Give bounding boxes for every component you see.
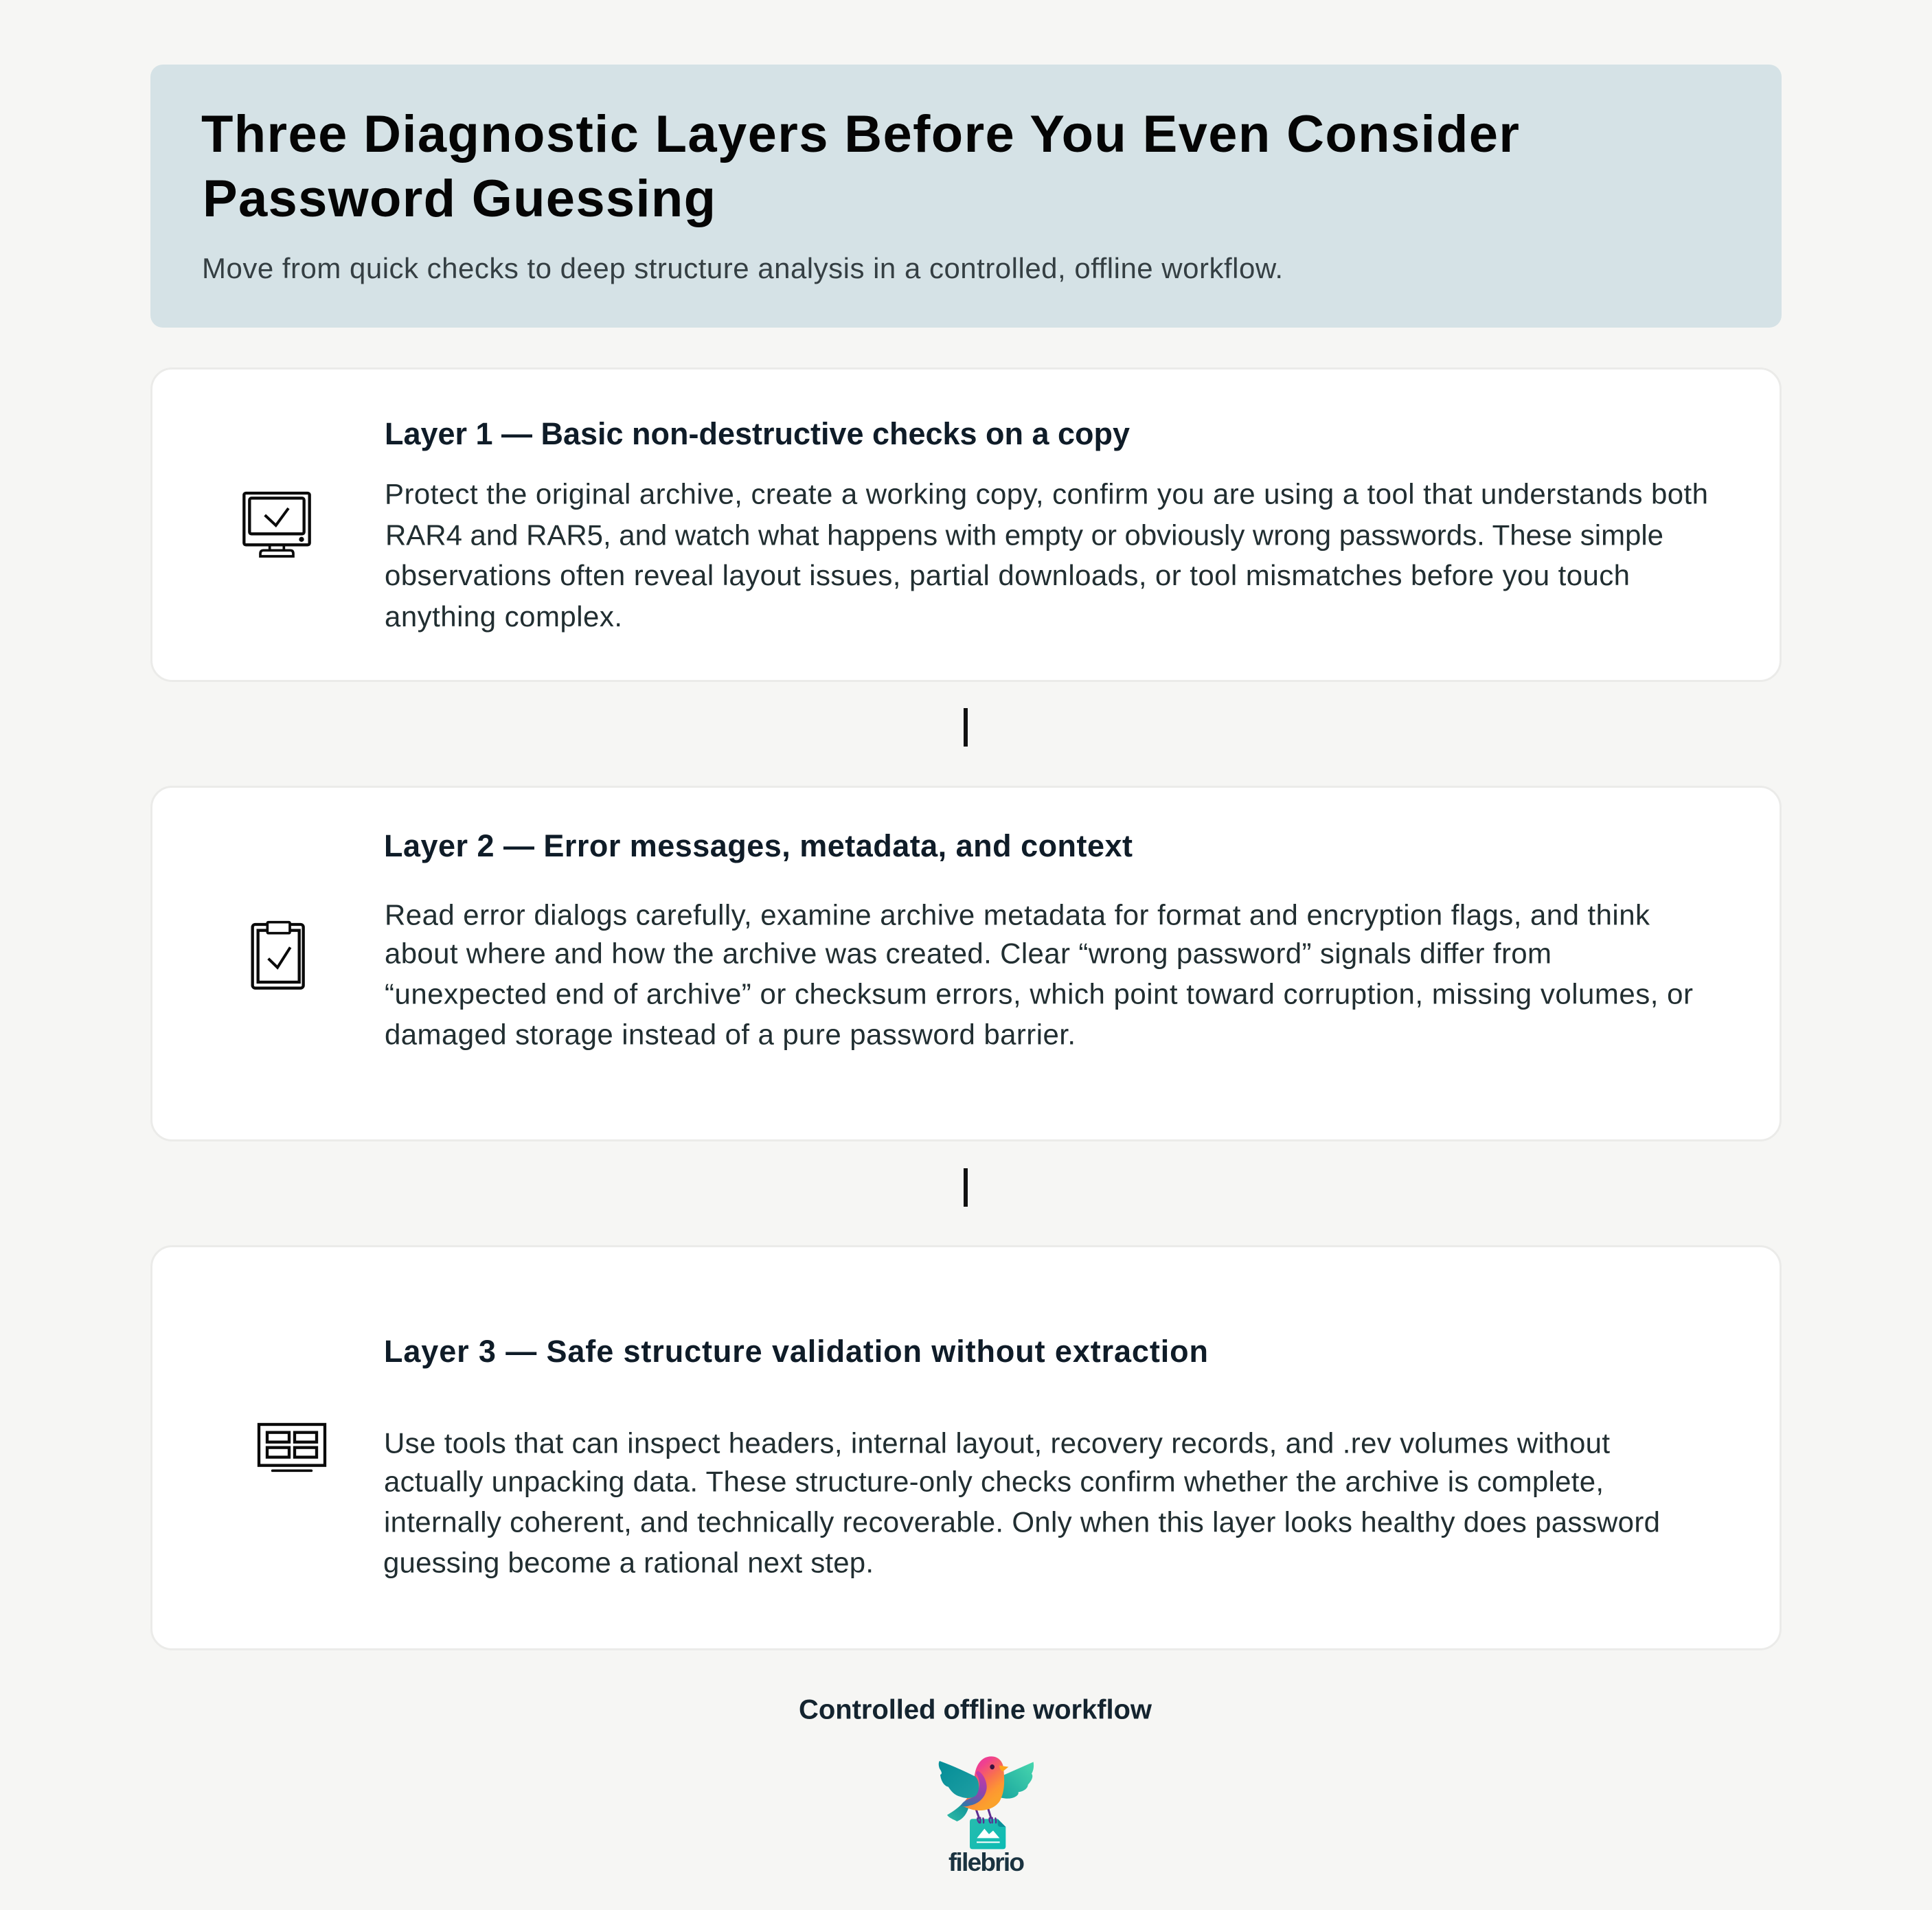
feet — [977, 1818, 996, 1823]
file — [970, 1819, 1005, 1849]
eye — [990, 1764, 995, 1769]
right wing — [999, 1762, 1034, 1799]
layer 2 body text: about where and how the archive was created. Clear “wrong password” signals differ from — [385, 937, 1552, 970]
layer 3 body text — [383, 1427, 1660, 1578]
tail — [947, 1803, 969, 1821]
layer 2 heading: Layer 2 — Error messages, metadata, and context — [384, 828, 1133, 863]
subtitle: Move from quick checks to deep structure analysis in a controlled, offline workflow. — [202, 252, 1283, 284]
layer 1 body text: anything complex. — [385, 600, 622, 633]
layer 1 body text: Protect the original archive, create a working copy, confirm you are using a tool that understands both — [385, 478, 1708, 510]
layer 1 body text — [385, 478, 1708, 633]
connector 1 — [964, 708, 968, 747]
layer 1 body text: RAR4 and RAR5, and watch what happens with empty or obviously wrong passwords. These simple — [385, 519, 1663, 551]
belly shadow — [961, 1771, 987, 1806]
file corner — [998, 1819, 1005, 1827]
layer 3 body text: actually unpacking data. These structure-only checks confirm whether the archive is complete, — [384, 1466, 1604, 1497]
layer 2 body text: Read error dialogs carefully, examine archive metadata for format and encryption flags, and think — [385, 898, 1650, 931]
body — [961, 1756, 1004, 1810]
layer 3 body text: guessing become a rational next step. — [383, 1547, 874, 1578]
layer 2 body text: “unexpected end of archive” or checksum errors, which point toward corruption, missing volumes, or — [385, 978, 1693, 1010]
title — [201, 105, 1519, 228]
file mountain — [977, 1829, 999, 1838]
icon: clipboard with check mark — [253, 922, 304, 988]
panel: layer 3 — [151, 1246, 1780, 1650]
logo: filebrio bird — [939, 1756, 1034, 1876]
panel: layer 1 — [151, 368, 1780, 681]
icon: window with grid — [259, 1424, 325, 1470]
layer 3 body text: Use tools that can inspect headers, internal layout, recovery records, and .rev volumes without — [384, 1427, 1610, 1459]
layer 1 body text: observations often reveal layout issues, partial downloads, or tool mismatches before you touch — [385, 559, 1630, 591]
layer 3 heading: Layer 3 — Safe structure validation without extraction — [384, 1334, 1208, 1369]
legs — [976, 1808, 991, 1819]
beak — [999, 1766, 1008, 1771]
footer caption: Controlled offline workflow — [799, 1695, 1152, 1725]
title: Password Guessing — [203, 170, 716, 228]
connector 2 — [964, 1168, 968, 1207]
layer 3 body text: internally coherent, and technically recoverable. Only when this layer looks healthy does password — [384, 1505, 1660, 1538]
layer 2 body text: damaged storage instead of a pure password barrier. — [385, 1018, 1076, 1051]
layer 2 body text — [385, 898, 1693, 1051]
panel: layer 2 — [151, 787, 1780, 1140]
layer 1 heading: Layer 1 — Basic non-destructive checks on a copy — [385, 416, 1130, 451]
wordmark: filebrio — [948, 1848, 1025, 1876]
title: Three Diagnostic Layers Before You Even Consider — [201, 105, 1519, 163]
left wing — [939, 1761, 979, 1798]
panel: header — [150, 65, 1782, 328]
icon: monitor with check mark — [244, 493, 310, 556]
